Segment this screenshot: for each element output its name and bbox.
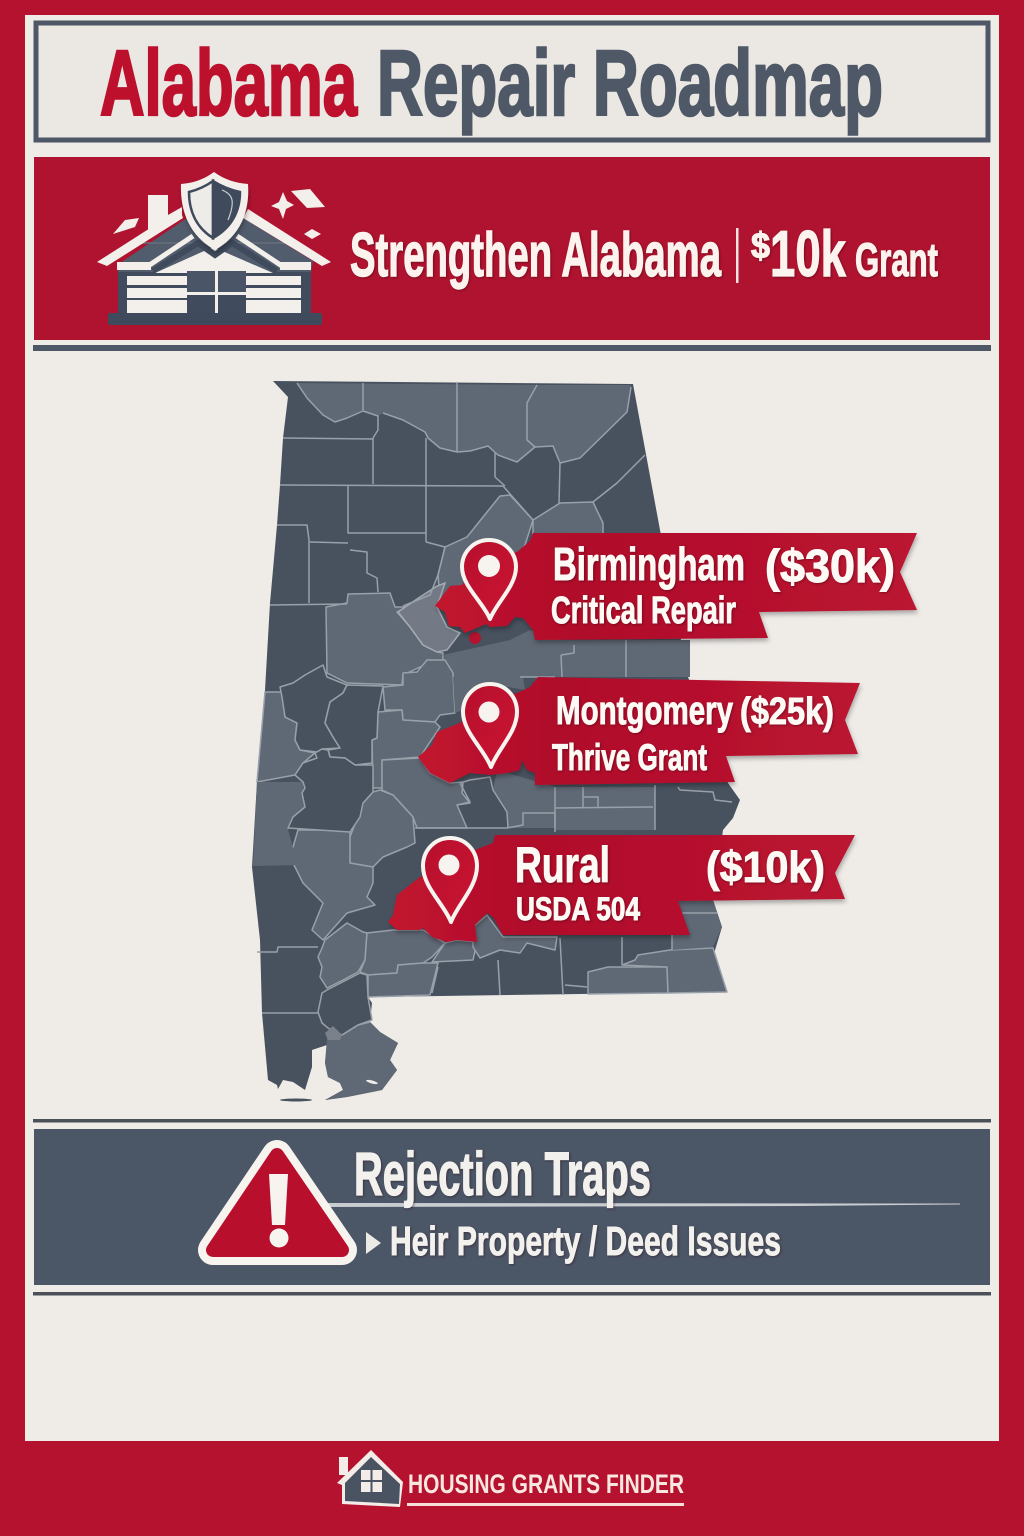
amount: $30k: ($30k) xyxy=(765,540,895,592)
banner text: Strengthen Alabama: Strengthen Alabama xyxy=(350,221,721,290)
pale patch near Mobile xyxy=(325,1026,342,1040)
label: Montgomery: Montgomery xyxy=(556,689,734,733)
icon: house with shield xyxy=(97,172,331,325)
bay slit xyxy=(366,1079,378,1085)
arrow bullet xyxy=(366,1232,381,1254)
divider xyxy=(736,228,738,283)
highlight: Birmingham county dot xyxy=(469,632,481,644)
panel: Rejection Traps xyxy=(34,1129,990,1285)
icon: footer house xyxy=(337,1450,403,1507)
text: Heir Property / Deed Issues: Heir Property / Deed Issues xyxy=(390,1218,781,1264)
map of Alabama xyxy=(252,381,740,1102)
amount: $25k: ($25k) xyxy=(740,691,834,733)
icon: pin Montgomery xyxy=(463,684,517,767)
callout: Rural xyxy=(388,835,855,942)
callout: Montgomery xyxy=(418,677,860,785)
label: Rural: Rural xyxy=(515,837,610,893)
lightest county xyxy=(398,583,460,652)
panel: Strengthen Alabama grant banner xyxy=(34,157,990,340)
heading: Rejection Traps: Rejection Traps xyxy=(354,1140,651,1208)
icon: pin Birmingham xyxy=(462,540,516,619)
rule under banner xyxy=(33,345,991,351)
brand underline xyxy=(407,1503,684,1506)
label: Critical Repair: Critical Repair xyxy=(551,590,736,632)
banner text: $10k Grant: $ xyxy=(751,225,770,266)
darker counties xyxy=(280,665,383,1035)
footer logo xyxy=(337,1450,684,1507)
underline rule xyxy=(328,1203,960,1207)
brand name: HOUSING GRANTS FINDER xyxy=(408,1469,684,1499)
banner text: $10k Grant xyxy=(751,217,938,290)
lighter counties xyxy=(253,383,727,1100)
county border lines xyxy=(257,383,732,1035)
banner text: $10k Grant: Grant xyxy=(855,233,938,286)
banner text: $10k Grant: 10k xyxy=(770,217,847,290)
label: USDA 504: USDA 504 xyxy=(516,891,640,927)
amount: $10k: ($10k) xyxy=(706,843,825,892)
label: Thrive Grant: Thrive Grant xyxy=(552,737,707,778)
callout: Birmingham xyxy=(435,533,917,640)
label: Birmingham: Birmingham xyxy=(553,538,745,590)
title box xyxy=(36,23,988,140)
icon: warning triangle xyxy=(213,1155,342,1250)
icon: pin Rural xyxy=(423,838,477,922)
rule below traps panel xyxy=(33,1292,991,1296)
rule above traps panel xyxy=(33,1119,991,1122)
title: Alabama: Alabama xyxy=(100,31,358,135)
